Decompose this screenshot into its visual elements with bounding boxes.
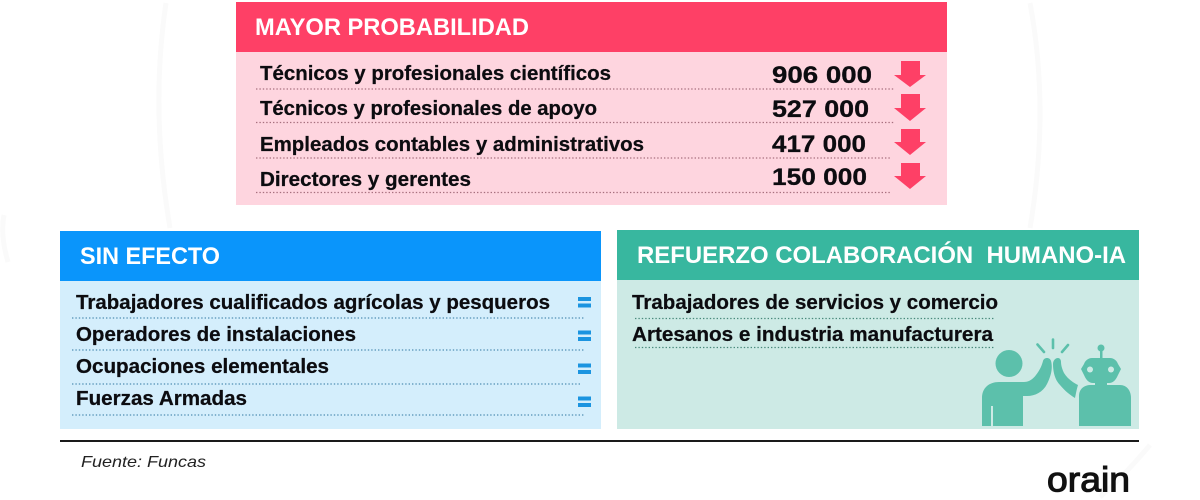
icon: human and robot high five — [982, 340, 1131, 426]
heading: sin efecto — [60, 231, 601, 281]
logo: orain: orain — [1047, 460, 1130, 500]
row: directores y gerentes: Directores y gerentes — [260, 169, 471, 191]
heading: refuerzo colaboración: REFUERZO COLABORACIÓN HUMANO-IA — [637, 241, 1126, 269]
row: técnicos y profesionales científicos — [256, 61, 926, 89]
row: trabajadores cualificados: Trabajadores cualificados agrícolas y pesqueros — [76, 292, 550, 314]
row: empleados contables y administrativos: Empleados contables y administrativos — [260, 134, 644, 156]
row: empleados contables y administrativos: 417 000 — [772, 131, 866, 158]
heading: refuerzo colaboración — [617, 230, 1139, 280]
row: técnicos y profesionales científicos: Técnicos y profesionales científicos — [260, 63, 611, 85]
row: técnicos y profesionales científicos: 906 000 — [772, 62, 872, 89]
heading: mayor probabilidad — [236, 2, 947, 52]
row: técnicos y profesionales de apoyo: Técnicos y profesionales de apoyo — [260, 98, 597, 120]
row: artesanos: Artesanos e industria manufacturera — [632, 324, 994, 346]
row: trabajadores de servicios: Trabajadores de servicios y comercio — [632, 292, 998, 314]
panel: refuerzo colaboración humano-IA — [617, 230, 1139, 429]
heading: sin efecto: SIN EFECTO — [80, 243, 220, 270]
row: directores y gerentes — [256, 163, 926, 192]
source note: Fuente: Funcas — [81, 454, 206, 471]
panel: mayor probabilidad — [236, 2, 947, 205]
row: técnicos y profesionales de apoyo: 527 000 — [772, 96, 869, 123]
divider line — [60, 440, 1139, 442]
row: ocupaciones elementales: Ocupaciones elementales — [76, 356, 329, 378]
row: operadores de instalaciones — [72, 324, 591, 350]
row: fuerzas armadas: Fuerzas Armadas — [76, 388, 247, 410]
row: directores y gerentes: 150 000 — [772, 164, 867, 191]
row: operadores de instalaciones: Operadores de instalaciones — [76, 324, 356, 346]
panel: sin efecto — [60, 231, 601, 429]
row: empleados contables y administrativos — [256, 129, 926, 158]
row: fuerzas armadas — [72, 388, 591, 415]
row: técnicos y profesionales de apoyo — [256, 94, 926, 123]
heading: mayor probabilidad: MAYOR PROBABILIDAD — [255, 14, 529, 41]
row: ocupaciones elementales — [72, 356, 591, 384]
